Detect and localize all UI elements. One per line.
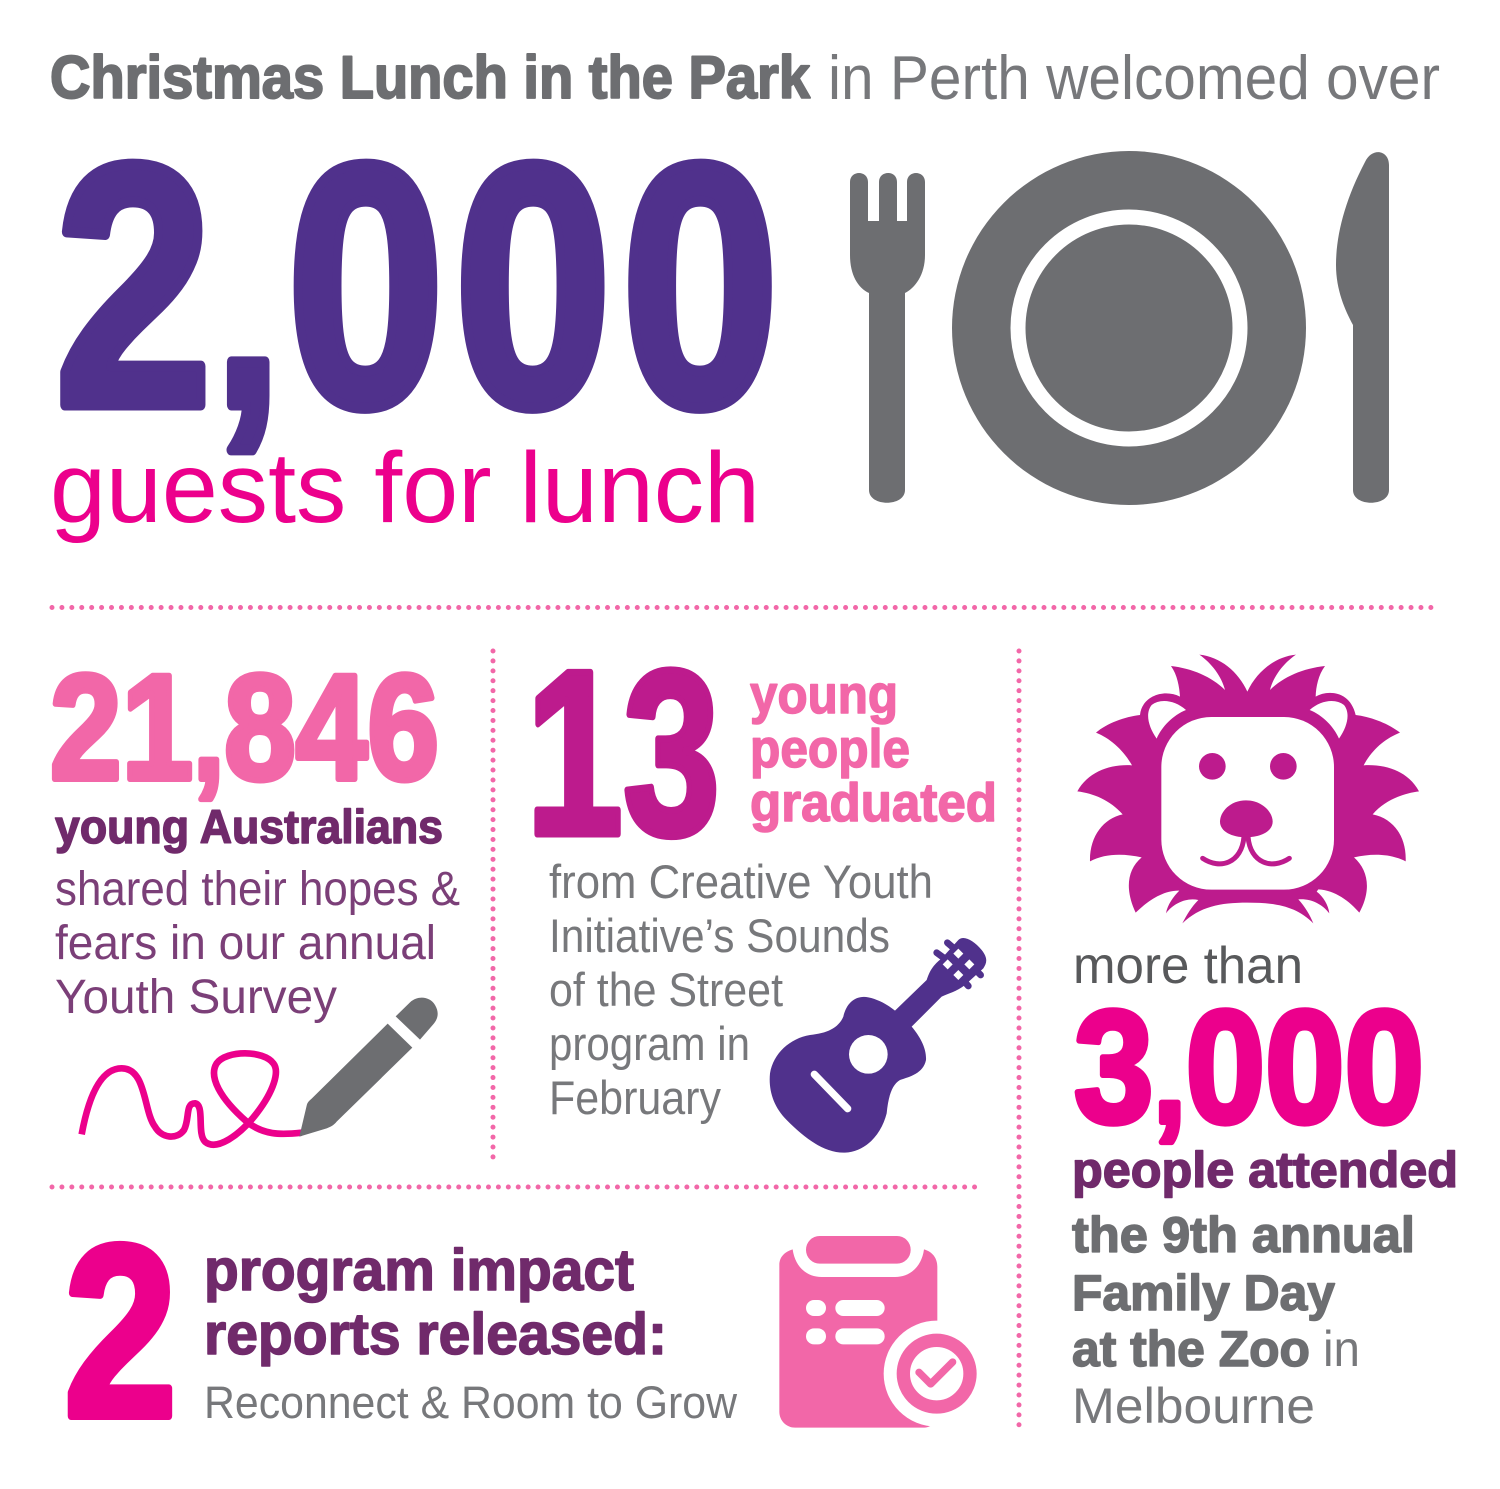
text: program description: Initiative’s Sounds (549, 909, 890, 962)
subheading: guests for lunch: guests for lunch (50, 432, 760, 544)
icon: fork (850, 173, 925, 503)
text: program impact reports released (204, 1238, 667, 1367)
text: program impact reports released: program impact (204, 1238, 634, 1303)
stat: 21,846: 21,846 (50, 643, 439, 811)
stat: 3,000: 3,000 (1074, 977, 1424, 1156)
text: young people graduated: people (750, 719, 910, 779)
title: in Perth welcomed over (828, 44, 1440, 113)
text: young Australians: young Australians (55, 800, 443, 853)
text: report names: Reconnect & Room to Grow (204, 1377, 737, 1428)
text: survey description (55, 863, 460, 1024)
big number: 2,000: 2 (55, 92, 212, 478)
icon: clipboard with check (779, 1236, 990, 1428)
text: young people graduated (750, 665, 997, 833)
panel: graduates (526, 621, 997, 1153)
text: program description: program in (549, 1017, 750, 1070)
text: family day details: the 9th annual (1072, 1207, 1415, 1263)
title: Christmas Lunch in the Park (50, 44, 811, 111)
text: family day details: Melbourne (1072, 1378, 1315, 1434)
text: family day details: Family Day (1072, 1265, 1335, 1321)
text: program description: February (549, 1071, 721, 1124)
icon: pen with squiggle (82, 998, 438, 1145)
icon: fork, plate and knife (850, 151, 1389, 505)
dotted dividers (52, 608, 1436, 1426)
text: survey description: fears in our annual (55, 917, 436, 970)
text: survey description: shared their hopes & (55, 863, 460, 916)
panel: family day (1072, 655, 1458, 1434)
text: young people graduated: graduated (750, 773, 997, 833)
text: more than: more than (1073, 937, 1303, 995)
icon: guitar (770, 938, 986, 1153)
text: program impact reports released: reports released: (204, 1302, 667, 1367)
big number: 2,000: 0 (622, 92, 779, 478)
text: survey description: Youth Survey (55, 971, 337, 1024)
stat: 2: 2 (64, 1194, 177, 1468)
text: family day details (1072, 1207, 1415, 1434)
text: family day details: in (1323, 1321, 1360, 1377)
text: family day details: at the Zoo (1072, 1321, 1310, 1377)
text: program description: of the Street (549, 963, 783, 1016)
text: program description: from Creative Youth (549, 855, 933, 908)
big number: 2,000: 0 (454, 92, 612, 478)
icon: lion (1077, 655, 1419, 923)
text: program description (549, 855, 933, 1124)
icon: knife (1336, 152, 1389, 503)
icon: plate (952, 151, 1306, 505)
big number: 2,000: , (215, 144, 281, 467)
stat: 13: 13 (526, 621, 720, 884)
big number: 2,000: 0 (287, 92, 444, 478)
text: young people graduated: young (750, 665, 898, 725)
text: people attended: people attended (1072, 1142, 1458, 1198)
panel: impact reports (64, 1194, 990, 1468)
title (50, 44, 1440, 113)
panel: youth survey (50, 643, 460, 1145)
